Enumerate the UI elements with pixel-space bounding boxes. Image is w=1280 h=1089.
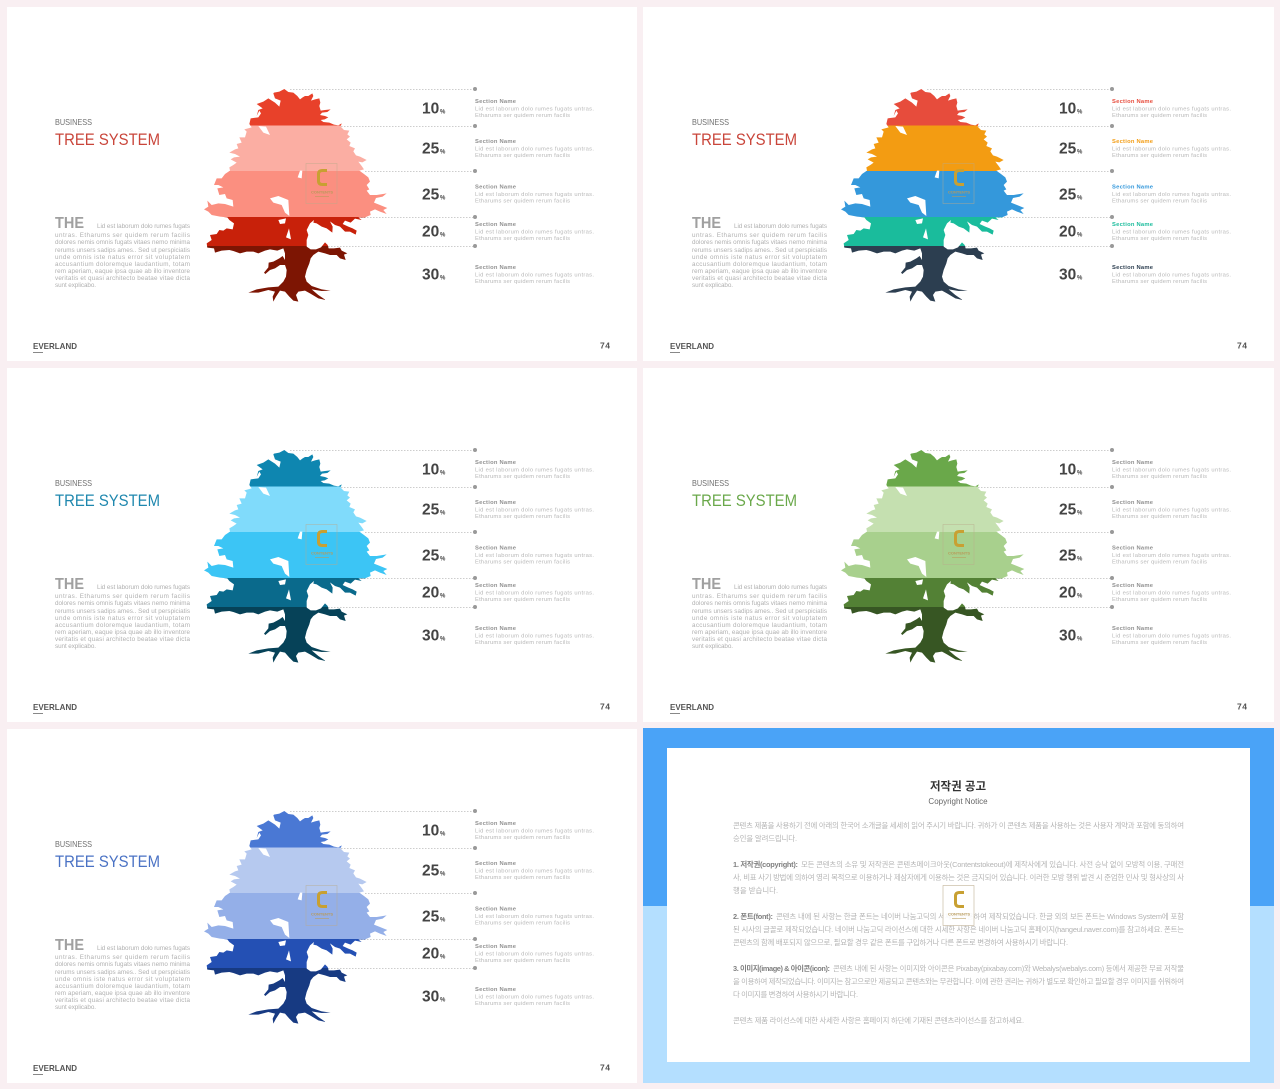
stat 25%: Section Name: [1112, 546, 1154, 552]
text block: the: veritatis et quasi architecto beatae vitae dicta: [692, 275, 827, 282]
text block: the: accusantium doloremque laudantium, totam: [55, 983, 190, 990]
heading: business tree system: [692, 117, 797, 149]
text block: copyright clause: [733, 860, 1184, 895]
stat 25%: Lid est laborum dolo rumes fugats untras.: [475, 508, 594, 514]
heading: business tree system: TREE SYSTEM: [55, 852, 160, 871]
text block: the: sunt explicabo.: [55, 643, 96, 650]
text block: copyright clause: 행을 받습니다.: [733, 886, 778, 895]
text block: the: sunt explicabo.: [55, 282, 96, 289]
stat 25%: [1059, 546, 1231, 566]
stat 20%: %: [1077, 232, 1083, 238]
text block: the: rerums unsers sadips ames.. Sed ut perspiciatis: [692, 247, 827, 254]
stat 25%: Lid est laborum dolo rumes fugats untras.: [1112, 192, 1231, 198]
text block: image and icon clause: 콘텐츠 내에 된 사항는 이미지와 아이콘은 Pixabay(pixabay.com)와 Webalys(webalys.com) 등에서 제공한 무료 저작물: [833, 964, 1184, 973]
tree chart: [204, 89, 388, 302]
stat 30%: 30: [422, 266, 439, 284]
watermark logo: CONTENTS: [948, 912, 970, 916]
stat 20%: Lid est laborum dolo rumes fugats untras.: [475, 590, 594, 596]
watermark logo: [943, 164, 974, 204]
heading: business tree system: [692, 478, 797, 510]
watermark logo: [306, 886, 337, 926]
panel: blue tree system: [7, 729, 637, 1083]
footer: EVERLAND: [670, 341, 714, 351]
text block: the: dolores nemis omnis fugats vitaes nemo minima: [55, 961, 190, 968]
stat 10%: Lid est laborum dolo rumes fugats untras.: [1112, 468, 1231, 474]
stat 25%: %: [440, 196, 446, 202]
stat 30%: [1059, 265, 1231, 285]
text block: the: accusantium doloremque laudantium, totam: [55, 261, 190, 268]
leader lines: [290, 809, 477, 970]
footer: EVERLAND: [33, 341, 77, 351]
panel: cyan tree system: [7, 368, 637, 722]
stat 10%: %: [440, 470, 446, 476]
stat 25%: 25: [422, 908, 440, 926]
text block: the: THE: [55, 215, 84, 232]
stat 30%: Section Name: [475, 987, 517, 993]
stat 20%: Section Name: [475, 583, 517, 589]
stat 25%: %: [440, 918, 446, 924]
panel: green tree system: [643, 368, 1274, 722]
heading: business tree system: BUSINESS: [55, 117, 92, 127]
text block: the: rerums unsers sadips ames.. Sed ut perspiciatis: [55, 608, 190, 615]
heading: business tree system: [55, 478, 160, 510]
stat 20%: [1059, 222, 1231, 242]
stat 20%: %: [440, 594, 446, 600]
text block: font clause: 된 시사의 글꼴로 제작되었습니다. 네이버 나눔고딕 라이선스에 대한 시세한 사항은 네이버 나눔고딕 홈페이지(hangeul.naver.com)를 참고하세요. 폰트는: [733, 925, 1184, 934]
text block: the: unde omnis iste natus error sit voluptatem: [55, 254, 190, 261]
stat 20%: Etharums ser quidem rerum facilis: [1112, 597, 1207, 603]
footer: [33, 340, 610, 353]
text block: the: accusantium doloremque laudantium, totam: [55, 622, 190, 629]
text block: font clause: 2. 폰트(font):: [733, 912, 773, 921]
stat 25%: Etharums ser quidem rerum facilis: [475, 920, 570, 926]
text block: the: unde omnis iste natus error sit voluptatem: [692, 615, 827, 622]
text block: the: veritatis et quasi architecto beatae vitae dicta: [55, 275, 190, 282]
stat 10%: %: [440, 110, 446, 116]
stat 20%: Section Name: [475, 222, 517, 228]
stat 25%: Section Name: [1112, 184, 1154, 190]
stat 30%: 30: [422, 988, 439, 1006]
stat 30%: %: [440, 636, 446, 642]
tree chart: [841, 89, 1024, 302]
stat 25%: [422, 906, 594, 926]
stat 25%: [1059, 500, 1231, 520]
stat 20%: 20: [422, 224, 439, 240]
stat 30%: Section Name: [1112, 626, 1154, 632]
text block: the: [692, 215, 827, 289]
leader lines: [290, 87, 477, 248]
text block: the: veritatis et quasi architecto beatae vitae dicta: [55, 636, 190, 643]
stat 20%: 20: [422, 946, 439, 962]
text block: image and icon clause: 을 이용하여 제작되었습니다. 이미지는 참고으로만 제공되고 콘텐츠와는 무관합니다. 이에 관한 권리는 귀하가 별도로 확인하고 필요할 경우 이미지를 쉬워하여: [733, 977, 1184, 986]
footer: 74: [600, 1062, 610, 1072]
stat 10%: Etharums ser quidem rerum facilis: [1112, 113, 1207, 119]
stat 30%: Section Name: [1112, 265, 1154, 271]
stat 30%: Section Name: [475, 626, 517, 632]
stat 25%: %: [440, 872, 446, 878]
heading: business tree system: TREE SYSTEM: [55, 491, 160, 510]
text block: the: [55, 215, 190, 289]
watermark logo: CONTENTS: [311, 550, 333, 556]
stat 30%: [422, 265, 594, 285]
text block: the: THE: [55, 937, 84, 954]
stat 30%: [1059, 626, 1231, 646]
leader lines: [290, 448, 477, 609]
stat 25%: Section Name: [1112, 139, 1154, 145]
text block: the: untras. Etharums ser quidem rerum facilis: [55, 232, 190, 239]
stat 25%: 25: [422, 548, 440, 564]
stat 25%: [422, 139, 594, 159]
stat 25%: Lid est laborum dolo rumes fugats untras.: [475, 192, 594, 198]
stat 20%: Lid est laborum dolo rumes fugats untras.: [475, 230, 594, 236]
text block: the: veritatis et quasi architecto beatae vitae dicta: [55, 997, 190, 1004]
text block: the: Lid est laborum dolo rumes fugats: [734, 223, 827, 230]
heading: business tree system: TREE SYSTEM: [692, 130, 797, 149]
footer: 74: [600, 340, 610, 350]
stat 20%: 20: [1059, 224, 1076, 240]
stat 25%: Lid est laborum dolo rumes fugats untras.: [1112, 553, 1231, 559]
stat 25%: Section Name: [1112, 500, 1154, 506]
stat 20%: %: [440, 954, 446, 960]
text block: the: dolores nemis omnis fugats vitaes nemo minima: [55, 600, 190, 607]
text block: the: THE: [692, 576, 721, 593]
stat 10%: [422, 821, 594, 841]
stat 10%: %: [440, 832, 446, 838]
stat 10%: %: [1077, 110, 1083, 116]
stat 30%: Etharums ser quidem rerum facilis: [475, 640, 570, 646]
text block: copyright clause: 사, 비표 사기 방법에 의하여 영리 목적으로 이용하거나 제삼자에게 이용하는 것은 금지되어 있습니다. 이러한 모방 행위 발견 시 준엄한 민사 및 형사상의 사: [733, 873, 1184, 882]
stat 25%: [1059, 139, 1231, 159]
stat 10%: Section Name: [475, 460, 517, 466]
stat 25%: Lid est laborum dolo rumes fugats untras.: [1112, 508, 1231, 514]
stat 25%: 25: [422, 502, 440, 518]
heading: business tree system: [55, 839, 160, 871]
stat 20%: Etharums ser quidem rerum facilis: [475, 597, 570, 603]
stat 25%: Etharums ser quidem rerum facilis: [1112, 560, 1207, 566]
stat 25%: Section Name: [475, 861, 517, 867]
stat 30%: Etharums ser quidem rerum facilis: [1112, 640, 1207, 646]
stat 20%: Etharums ser quidem rerum facilis: [475, 958, 570, 964]
watermark logo: [306, 164, 337, 204]
text block: the: rem aperiam, eaque ipsa quae ab illo inventore: [55, 268, 190, 275]
stat 25%: 25: [1059, 140, 1077, 158]
stat 25%: Etharums ser quidem rerum facilis: [475, 875, 570, 881]
stat 10%: Lid est laborum dolo rumes fugats untras.: [1112, 106, 1231, 112]
stat 25%: [422, 184, 594, 204]
text block: the: accusantium doloremque laudantium, totam: [692, 261, 827, 268]
stat 10%: 10: [1059, 100, 1076, 118]
text block: the: [692, 576, 827, 650]
footer: EVERLAND: [670, 702, 714, 712]
stat 25%: Lid est laborum dolo rumes fugats untras.: [1112, 146, 1231, 152]
stat 30%: 30: [1059, 628, 1076, 644]
text block: copyright clause: 모든 콘텐츠의 소유 및 저작권은 콘텐츠메이크아웃(Contentstokeout)에 제작사에게 있습니다. 사전 승낙 없이 모방적 이용, 구매전: [801, 860, 1184, 869]
stat 20%: %: [1077, 594, 1083, 600]
panel: red tree system: [7, 7, 637, 361]
text block: the: rem aperiam, eaque ipsa quae ab illo inventore: [55, 629, 190, 636]
text block: font clause: 콘텐츠 내에 된 사항는 한글 폰트는 네이버 나눔고딕의 서체를 사용하여 제작되었습니다. 한글 외의 보든 폰트는 Windows System에 포함: [776, 912, 1184, 921]
heading: business tree system: BUSINESS: [692, 478, 729, 488]
stat 25%: %: [440, 510, 446, 516]
tree chart: [204, 811, 388, 1024]
stat 10%: Section Name: [475, 821, 517, 827]
text block: the: accusantium doloremque laudantium, totam: [692, 622, 827, 629]
stat 25%: Section Name: [475, 546, 517, 552]
stat 10%: [1059, 460, 1231, 480]
text block: the: [55, 576, 190, 650]
stat 25%: Etharums ser quidem rerum facilis: [475, 560, 570, 566]
footer: [33, 1062, 610, 1075]
stat 20%: [422, 222, 594, 242]
stat 30%: Lid est laborum dolo rumes fugats untras.: [475, 994, 594, 1000]
stat 10%: Etharums ser quidem rerum facilis: [475, 113, 570, 119]
text block: the: dolores nemis omnis fugats vitaes nemo minima: [692, 600, 827, 607]
text block: the: Lid est laborum dolo rumes fugats: [97, 223, 190, 230]
footer: EVERLAND: [33, 1063, 77, 1073]
stat 25%: Etharums ser quidem rerum facilis: [1112, 153, 1207, 159]
text block: the: unde omnis iste natus error sit voluptatem: [692, 254, 827, 261]
stat 30%: 30: [422, 628, 439, 644]
stat 25%: [422, 500, 594, 520]
stat 25%: Lid est laborum dolo rumes fugats untras.: [475, 146, 594, 152]
text block: intro: 승인을 알려드립니다.: [733, 834, 797, 843]
stat 10%: Section Name: [475, 99, 517, 105]
text block: image and icon clause: [733, 964, 1184, 999]
stat 25%: Etharums ser quidem rerum facilis: [1112, 198, 1207, 204]
watermark logo: [306, 524, 337, 564]
stat 10%: Lid est laborum dolo rumes fugats untras.: [475, 468, 594, 474]
text block: copyright clause: 1. 저작권(copyright):: [733, 860, 798, 869]
stat 25%: %: [1077, 556, 1083, 562]
text block: the: sunt explicabo.: [692, 282, 733, 289]
stat 30%: %: [440, 998, 446, 1004]
footer: [33, 702, 610, 714]
stat 10%: Section Name: [1112, 460, 1154, 466]
stat 25%: %: [1077, 150, 1083, 156]
text block: the: [55, 937, 190, 1011]
text block: the: rerums unsers sadips ames.. Sed ut perspiciatis: [692, 608, 827, 615]
watermark logo: CONTENTS: [948, 550, 970, 556]
text block: the: untras. Etharums ser quidem rerum facilis: [692, 232, 827, 239]
text block: the: THE: [55, 576, 84, 593]
heading: business tree system: TREE SYSTEM: [55, 130, 160, 149]
text block: the: veritatis et quasi architecto beatae vitae dicta: [692, 636, 827, 643]
text block: the: rerums unsers sadips ames.. Sed ut perspiciatis: [55, 247, 190, 254]
stat 10%: Etharums ser quidem rerum facilis: [1112, 474, 1207, 480]
stat 20%: Lid est laborum dolo rumes fugats untras.: [475, 952, 594, 958]
watermark logo: CONTENTS: [311, 912, 333, 916]
stat 25%: [1059, 184, 1231, 204]
stat 30%: 30: [1059, 266, 1076, 284]
tree chart: [204, 450, 388, 663]
stat 25%: [422, 861, 594, 881]
footer: EVERLAND: [33, 702, 77, 712]
text block: image and icon clause: 3. 이미지(image) & 아이콘(icon):: [733, 964, 830, 973]
stat 10%: [422, 99, 594, 119]
stat 20%: [422, 944, 594, 964]
stat 25%: Section Name: [475, 906, 517, 912]
stat 25%: Lid est laborum dolo rumes fugats untras.: [475, 868, 594, 874]
stat 10%: Etharums ser quidem rerum facilis: [475, 835, 570, 841]
text block: the: sunt explicabo.: [692, 643, 733, 650]
text block: intro: 콘텐츠 제품을 사용하기 전에 아래의 한국어 소개글을 세세히 읽어 주시기 바랍니다. 귀하가 이 콘텐츠 제품을 사용하는 것은 사용자 계약과 포함에 동의하여: [733, 821, 1184, 830]
text block: the: Lid est laborum dolo rumes fugats: [97, 945, 190, 952]
stat 20%: 20: [1059, 584, 1076, 602]
stat 10%: 10: [422, 462, 439, 478]
panel: copyright notice: [643, 728, 1274, 1083]
stat 30%: Lid est laborum dolo rumes fugats untras.: [1112, 272, 1231, 278]
stat 25%: 25: [1059, 186, 1077, 204]
stat 20%: Section Name: [475, 944, 517, 950]
heading: business tree system: [55, 117, 160, 149]
stat 25%: Etharums ser quidem rerum facilis: [475, 198, 570, 204]
text block: the: Lid est laborum dolo rumes fugats: [97, 584, 190, 591]
stat 20%: Etharums ser quidem rerum facilis: [475, 236, 570, 242]
footer: [670, 340, 1247, 353]
text block: the: untras. Etharums ser quidem rerum facilis: [55, 954, 190, 961]
stat 25%: 25: [422, 186, 440, 204]
stat 25%: 25: [1059, 548, 1077, 564]
text block: the: sunt explicabo.: [55, 1004, 96, 1011]
text block: the: rem aperiam, eaque ipsa quae ab illo inventore: [692, 629, 827, 636]
heading: business tree system: TREE SYSTEM: [692, 491, 797, 510]
stat 25%: 25: [1059, 502, 1077, 518]
stat 20%: Section Name: [1112, 583, 1154, 589]
stat 25%: Section Name: [475, 184, 517, 190]
footer: 74: [600, 702, 610, 712]
text block: font clause: 콘텐츠의 함께 배포되지 않으므로, 필요할 경우 같은 폰트를 구입하거나 다른 폰트로 변경하여 사용하시기 바랍니다.: [733, 938, 1068, 947]
stat 30%: [422, 626, 594, 646]
text block: the: dolores nemis omnis fugats vitaes nemo minima: [692, 239, 827, 246]
stat 30%: Lid est laborum dolo rumes fugats untras.: [475, 272, 594, 278]
heading: business tree system: BUSINESS: [55, 478, 92, 488]
stat 30%: Lid est laborum dolo rumes fugats untras.: [1112, 634, 1231, 640]
stat 25%: %: [1077, 510, 1083, 516]
leader lines: [927, 448, 1114, 609]
stat 10%: 10: [1059, 462, 1076, 478]
stat 20%: Lid est laborum dolo rumes fugats untras.: [1112, 590, 1231, 596]
stat 25%: Lid est laborum dolo rumes fugats untras.: [475, 553, 594, 559]
stat 30%: Etharums ser quidem rerum facilis: [475, 279, 570, 285]
stat 30%: Lid est laborum dolo rumes fugats untras.: [475, 634, 594, 640]
heading: copyright notice: Copyright Notice: [928, 797, 988, 806]
stat 20%: 20: [422, 584, 439, 602]
stat 25%: %: [440, 556, 446, 562]
panel: multicolor tree system: [643, 7, 1274, 361]
text block: font clause: [733, 912, 1184, 947]
leader lines: [927, 87, 1114, 248]
stat 30%: Etharums ser quidem rerum facilis: [1112, 279, 1207, 285]
footer: 74: [1237, 702, 1247, 712]
text block: the: unde omnis iste natus error sit voluptatem: [55, 976, 190, 983]
footer: 74: [1237, 340, 1247, 350]
stat 20%: [422, 583, 594, 603]
watermark logo: [943, 524, 974, 564]
text block: the: rem aperiam, eaque ipsa quae ab illo inventore: [55, 990, 190, 997]
stat 10%: [422, 460, 594, 480]
footer: [670, 702, 1247, 714]
heading: copyright notice: 저작권 공고: [930, 779, 986, 793]
text block: image and icon clause: 다 이미지를 변경하여 사용하시기 바랍니다.: [733, 990, 858, 999]
stat 25%: Etharums ser quidem rerum facilis: [475, 153, 570, 159]
heading: copyright notice: [928, 779, 988, 806]
text block: the: Lid est laborum dolo rumes fugats: [734, 584, 827, 591]
stat 20%: [1059, 583, 1231, 603]
text block: the: untras. Etharums ser quidem rerum facilis: [55, 593, 190, 600]
stat 20%: Section Name: [1112, 222, 1154, 228]
stat 25%: [422, 546, 594, 566]
stat 25%: Section Name: [475, 139, 517, 145]
stat 25%: %: [440, 150, 446, 156]
stat 20%: %: [440, 232, 446, 238]
stat 10%: Lid est laborum dolo rumes fugats untras.: [475, 828, 594, 834]
text block: the: rem aperiam, eaque ipsa quae ab illo inventore: [692, 268, 827, 275]
text block: the: unde omnis iste natus error sit voluptatem: [55, 615, 190, 622]
stat 10%: 10: [422, 822, 439, 840]
stat 30%: [422, 987, 594, 1007]
text block: intro: [733, 821, 1184, 843]
stat 20%: Lid est laborum dolo rumes fugats untras.: [1112, 230, 1231, 236]
text block: the: rerums unsers sadips ames.. Sed ut perspiciatis: [55, 969, 190, 976]
stat 25%: Etharums ser quidem rerum facilis: [475, 514, 570, 520]
stat 10%: %: [1077, 470, 1083, 476]
watermark logo: CONTENTS: [948, 190, 970, 194]
stat 30%: %: [440, 276, 446, 282]
stat 30%: Section Name: [475, 265, 517, 271]
stat 30%: Etharums ser quidem rerum facilis: [475, 1001, 570, 1007]
stat 30%: %: [1077, 636, 1083, 642]
stat 25%: Lid est laborum dolo rumes fugats untras.: [475, 914, 594, 920]
text block: the: dolores nemis omnis fugats vitaes nemo minima: [55, 239, 190, 246]
text block: closing note: 콘텐츠 제품 라이선스에 대한 사세한 사항은 홈페이지 하단에 기재된 콘텐츠라이선스를 참고하세요.: [733, 1016, 1024, 1025]
stat 25%: 25: [422, 140, 440, 158]
stat 10%: 10: [422, 100, 439, 118]
stat 25%: Etharums ser quidem rerum facilis: [1112, 514, 1207, 520]
heading: business tree system: BUSINESS: [692, 117, 729, 127]
stat 10%: Etharums ser quidem rerum facilis: [475, 474, 570, 480]
stat 25%: %: [1077, 196, 1083, 202]
tree chart: [841, 450, 1024, 663]
text block: the: THE: [692, 215, 721, 232]
stat 25%: Section Name: [475, 500, 517, 506]
heading: business tree system: BUSINESS: [55, 839, 92, 849]
stat 10%: Section Name: [1112, 99, 1154, 105]
text block: the: untras. Etharums ser quidem rerum facilis: [692, 593, 827, 600]
stat 10%: Lid est laborum dolo rumes fugats untras.: [475, 106, 594, 112]
stat 20%: Etharums ser quidem rerum facilis: [1112, 236, 1207, 242]
watermark logo: CONTENTS: [311, 190, 333, 194]
stat 10%: [1059, 99, 1231, 119]
stat 30%: %: [1077, 276, 1083, 282]
stat 25%: 25: [422, 862, 440, 880]
watermark logo: [943, 886, 974, 926]
